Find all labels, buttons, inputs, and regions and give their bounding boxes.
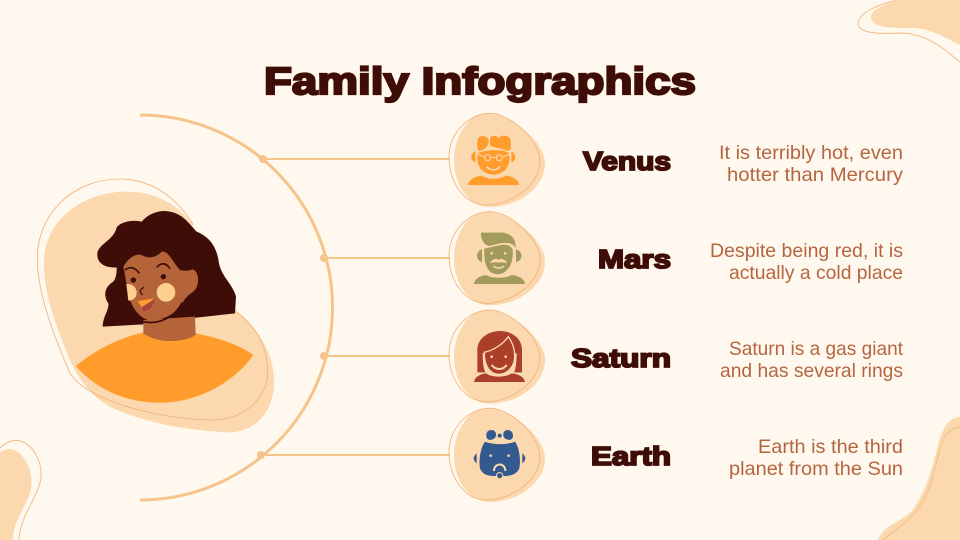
corner shape: bottom left (0, 440, 41, 540)
large arc (140, 115, 332, 500)
row 1: Venus (449, 113, 903, 207)
row 2: Mars (449, 212, 903, 305)
description (720, 338, 904, 382)
description: It is terribly hot, even (719, 142, 903, 164)
row 3: Saturn (449, 310, 904, 404)
description: Earth is the third (758, 436, 903, 458)
icon: grandfather (449, 212, 545, 305)
name: Mars (598, 244, 671, 274)
description: Despite being red, it is (710, 240, 903, 262)
description: and has several rings (720, 360, 903, 382)
description: planet from the Sun (729, 458, 903, 480)
description: actually a cold place (729, 262, 903, 284)
row 4: Earth (449, 408, 903, 502)
description: Saturn is a gas giant (729, 338, 904, 360)
description (719, 142, 903, 186)
connector lines (257, 155, 450, 459)
corner shape: bottom right (878, 417, 960, 540)
name: Venus (583, 146, 671, 176)
blob: row 4 (449, 408, 545, 502)
portrait: woman (37, 179, 274, 432)
description (710, 240, 903, 284)
icon: mother (474, 331, 525, 382)
icon: baby (474, 430, 525, 479)
title: Family Infographics (264, 61, 696, 103)
corner shape: top right (858, 0, 960, 62)
name: Saturn (571, 343, 671, 373)
name: Earth (591, 441, 671, 471)
icon: grandmother (449, 113, 545, 207)
description (729, 436, 903, 480)
blob: row 3 (449, 310, 545, 404)
description: hotter than Mercury (727, 164, 903, 186)
